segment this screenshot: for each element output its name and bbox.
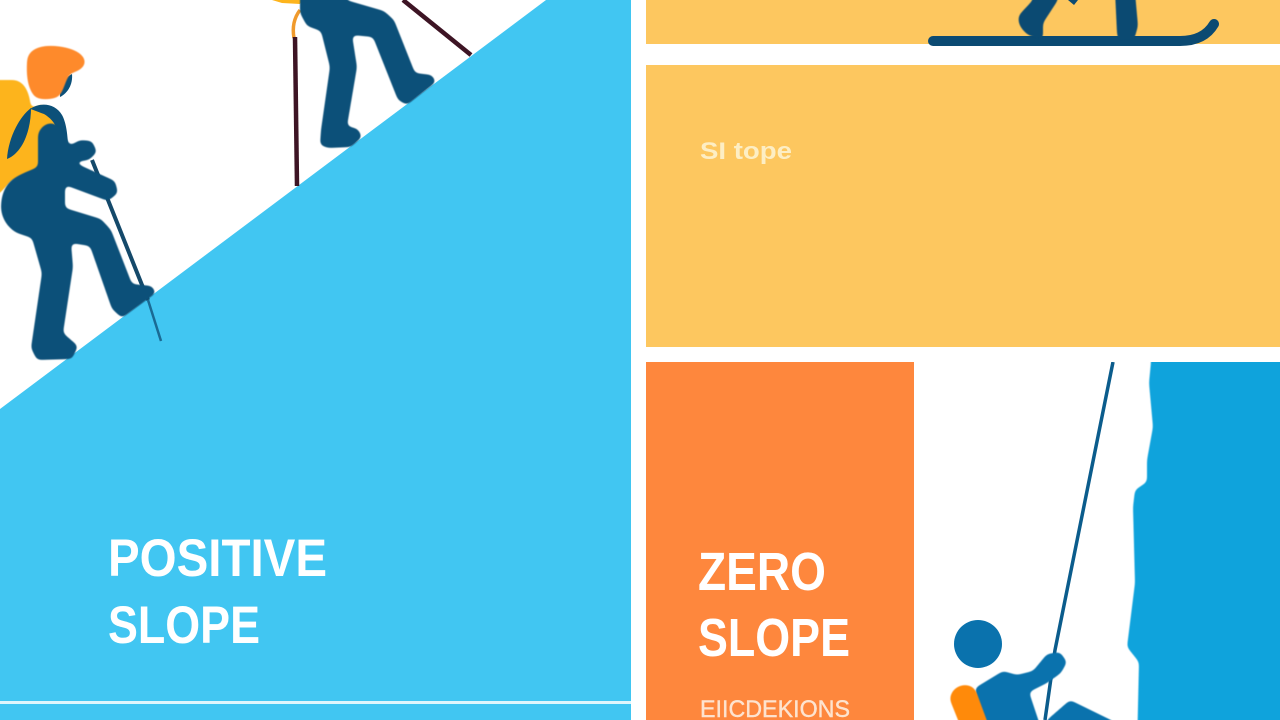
rope <box>1045 362 1113 720</box>
panel: slope text <box>646 65 1280 347</box>
heading: positive slope <box>108 529 327 655</box>
blue hill <box>0 0 631 720</box>
left pole <box>295 37 297 186</box>
panel: skier band <box>646 0 1280 44</box>
face <box>60 74 72 97</box>
icon: front hiker <box>0 46 161 360</box>
pole grip <box>293 10 300 38</box>
rock face <box>1127 330 1280 720</box>
left leg <box>1018 0 1058 40</box>
heading: positive slope: SLOPE <box>108 596 260 655</box>
head <box>27 46 85 99</box>
panel: zero slope <box>646 362 914 720</box>
heading: zero slope: SLOPE <box>698 608 850 668</box>
strap <box>7 108 31 159</box>
right pole <box>403 0 471 55</box>
legs <box>300 0 436 148</box>
pack corner <box>272 0 302 4</box>
icon: skier <box>933 0 1214 41</box>
panel: positive slope <box>0 0 631 720</box>
heading: positive slope: POSITIVE <box>108 529 327 588</box>
heading: zero slope: ZERO <box>698 542 826 602</box>
ski <box>933 24 1214 41</box>
thigh <box>1047 700 1112 720</box>
heading: zero slope <box>698 542 850 668</box>
harness <box>950 684 988 720</box>
right leg <box>1114 0 1138 40</box>
head <box>954 620 1002 668</box>
icon: rear hiker <box>272 0 471 186</box>
label: slope: SI tope <box>700 138 792 165</box>
body <box>1 123 156 360</box>
strap arc <box>30 105 68 150</box>
hiking pole <box>92 160 148 300</box>
panel: climbing wall <box>950 330 1280 720</box>
hand <box>1068 0 1078 5</box>
torso and arm <box>975 652 1067 720</box>
backpack <box>0 80 58 210</box>
icon: climber <box>950 620 1120 720</box>
